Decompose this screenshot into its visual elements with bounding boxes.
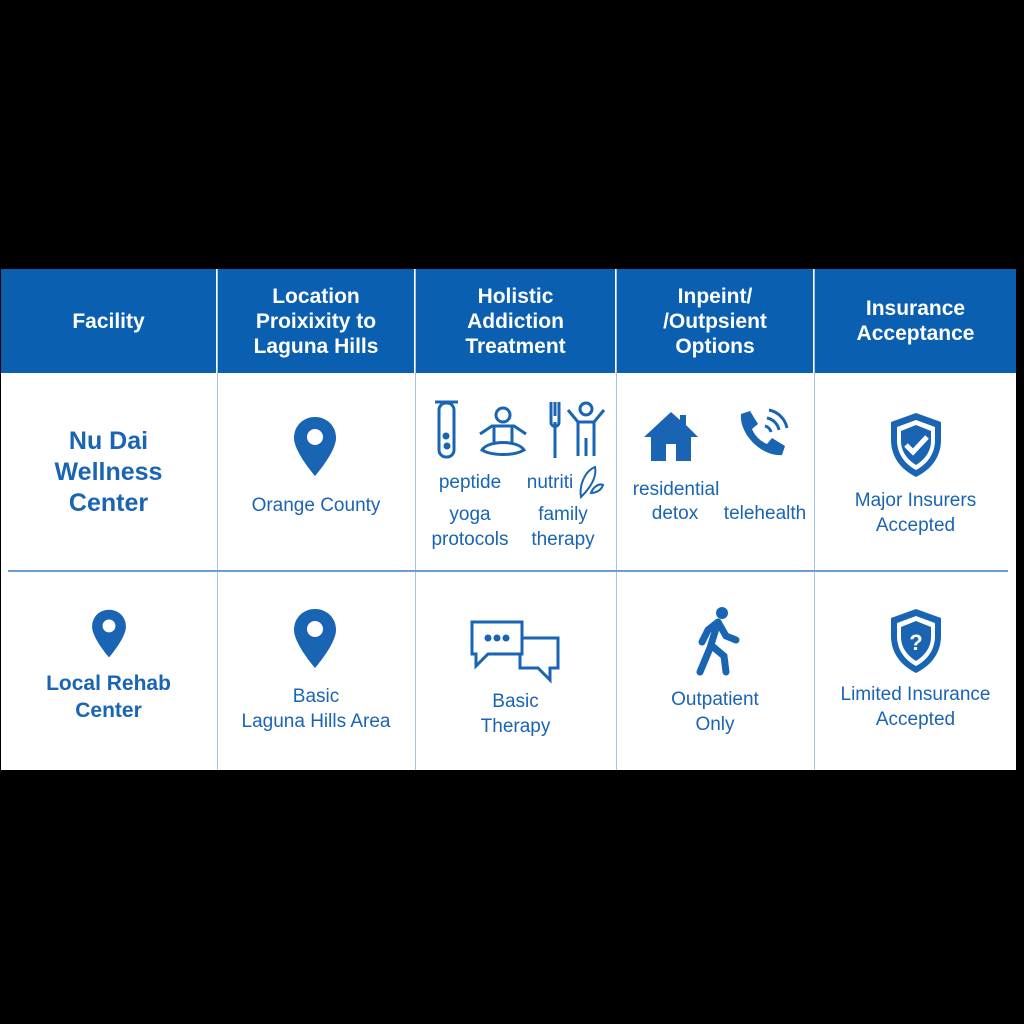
options labels: residential	[633, 479, 719, 500]
icon: walking person	[696, 607, 740, 676]
facility name: Local Rehab: Center	[75, 699, 142, 722]
text: Major insurers	[855, 490, 976, 536]
text: Major insurers: Major Insurers	[855, 490, 976, 511]
text: Limited insurance: Limited Insurance	[841, 684, 990, 705]
header: Location: Laguna Hills	[254, 334, 378, 358]
text: therapy	[531, 529, 595, 550]
header: Location: Location	[272, 284, 360, 308]
text: Outpatient only: Only	[695, 714, 735, 735]
header: Location	[218, 269, 414, 373]
text: nutriti	[527, 472, 573, 493]
icon: pin row2	[294, 609, 336, 668]
table panel	[1, 269, 1016, 770]
text: Basic Laguna Hills Area	[242, 686, 390, 732]
facility name: Nu Dai: Nu Dai	[69, 427, 148, 455]
header: Insurance	[815, 269, 1016, 373]
header: Inpatient: /Outpsient	[663, 310, 767, 332]
header: Location: Proixixity to	[256, 310, 376, 332]
header: Holistic: Addiction	[467, 310, 564, 332]
text: Limited insurance	[841, 684, 990, 730]
icon: pin row1	[294, 417, 336, 476]
icon: shield question	[891, 609, 941, 673]
text: Basic Laguna Hills Area: Laguna Hills Area	[242, 711, 390, 732]
text: Major insurers: Accepted	[876, 515, 955, 536]
text: Outpatient only	[671, 689, 759, 735]
icon: shield check	[891, 413, 941, 477]
facility name: Nu Dai: Wellness	[55, 458, 162, 486]
text: Basic Laguna Hills Area: Basic	[293, 686, 339, 707]
header: Inpatient	[617, 269, 813, 373]
header: Inpatient: Options	[675, 334, 755, 358]
header: Insurance: Acceptance	[857, 322, 974, 345]
text: telehealth	[724, 503, 806, 524]
header: Facility: Facility	[72, 310, 145, 332]
icon: phone	[740, 408, 788, 456]
text: protocols	[431, 529, 509, 550]
holistic labels: peptide	[439, 472, 501, 493]
header: Facility	[1, 269, 216, 373]
header: Inpatient: Inpeint/	[678, 284, 752, 308]
text: Outpatient only: Outpatient	[671, 689, 759, 710]
facility name: Local Rehab	[46, 672, 171, 722]
icon: chat bubbles	[470, 620, 560, 684]
icon: leaf	[580, 466, 604, 499]
icon: house	[644, 412, 698, 461]
header: Holistic: Treatment	[465, 334, 566, 358]
text: detox	[652, 503, 698, 524]
header: Holistic: Holistic	[478, 284, 553, 308]
text: Basic Therapy	[481, 691, 550, 737]
facility name: Nu Dai: Center	[69, 489, 148, 517]
icons: holistic	[435, 400, 606, 458]
text: Basic Therapy: Therapy	[481, 716, 550, 737]
text: yoga	[449, 504, 491, 525]
text: Limited insurance: Accepted	[876, 709, 955, 730]
text: Orange County: Orange County	[252, 495, 380, 516]
text: family	[538, 504, 588, 525]
icon: shield question: ?	[909, 630, 923, 655]
header: Holistic	[416, 269, 615, 373]
facility name: Local Rehab: Local Rehab	[46, 672, 171, 695]
header: Insurance: Insurance	[866, 297, 965, 320]
text: Basic Therapy: Basic	[492, 691, 539, 712]
facility name: Nu Dai	[54, 427, 162, 517]
icon: pin row2 col1	[92, 610, 126, 658]
